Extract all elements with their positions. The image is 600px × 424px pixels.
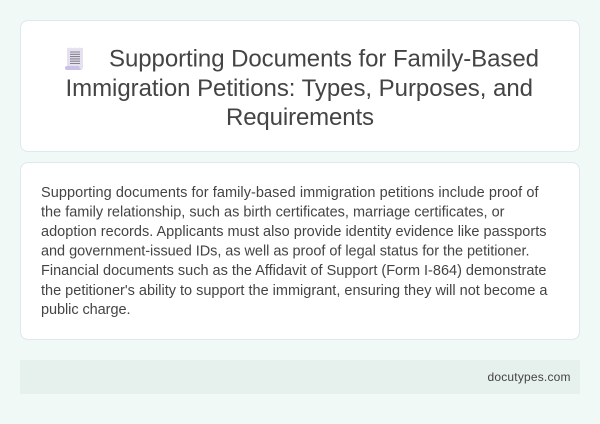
footer bar: [20, 360, 580, 394]
text block: description: adoption records. Applicants must also provide identity evidence like passports: [41, 224, 546, 240]
text block: description: the family relationship, such as birth certificates, marriage certificates, or: [41, 204, 505, 220]
title: Supporting Documents for Family-Based: [109, 46, 539, 72]
panel: title card: [20, 20, 580, 152]
title: [66, 46, 539, 131]
title: Requirements: [226, 104, 374, 131]
icon: document: [65, 48, 83, 70]
panel: description card: [20, 162, 580, 340]
text block: description: public charge.: [41, 302, 130, 318]
text block: description: Financial documents such as the Affidavit of Support (Form I-864) demonstrate: [41, 263, 546, 279]
title: Immigration Petitions: Types, Purposes, and: [66, 75, 533, 102]
text block: description: Supporting documents for family-based immigration petitions include proof of: [41, 185, 539, 201]
text block: description: [41, 185, 548, 318]
footer text: docutypes.com: [488, 370, 570, 384]
text block: description: and government-issued IDs, as well as proof of legal status for the petitioner.: [41, 244, 530, 260]
text block: description: the petitioner's ability to support the immigrant, ensuring they will not become a: [41, 283, 548, 299]
